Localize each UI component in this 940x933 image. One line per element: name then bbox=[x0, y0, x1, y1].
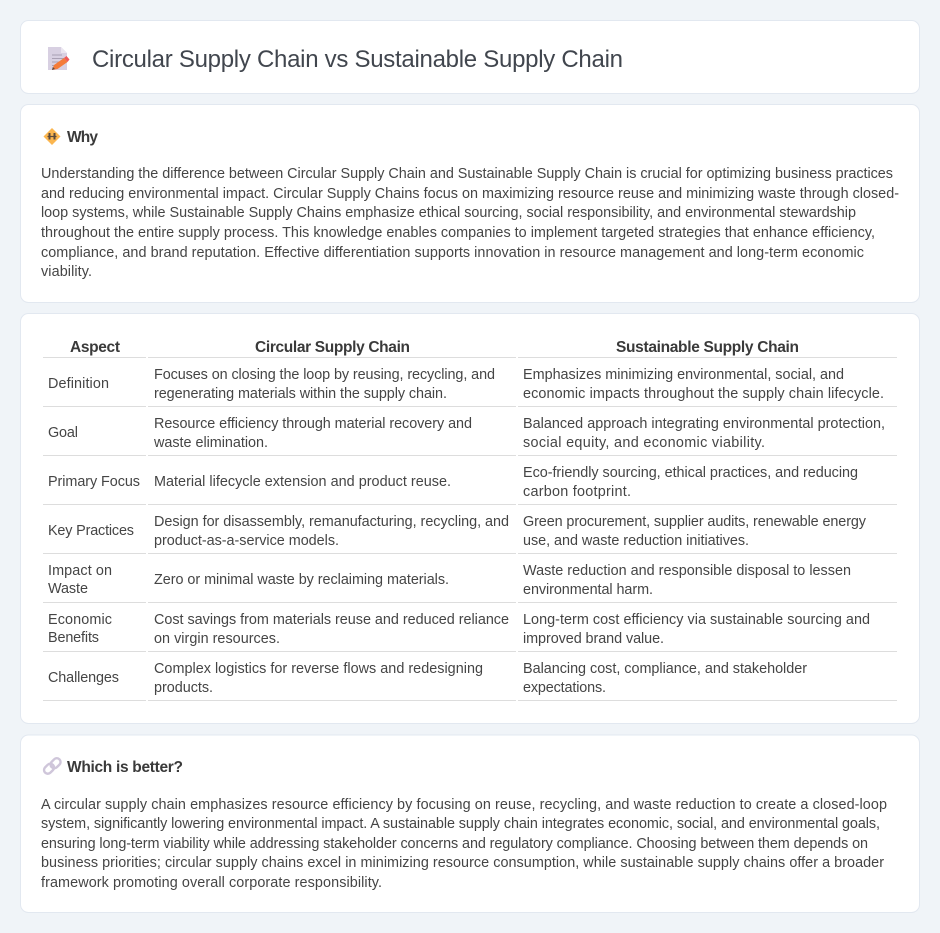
text block: which is better: framework promoting overall corporate responsibility. bbox=[41, 875, 382, 891]
row: primary focus bbox=[48, 465, 858, 500]
row: key practices: product-as-a-service models. bbox=[154, 533, 339, 549]
row: definition: Focuses on closing the loop by reusing, recycling, and bbox=[154, 367, 495, 383]
text block: why: and reducing environmental impact. Circular Supply Chains focus on maximizing resource reuse and minimizing waste through closed- bbox=[41, 186, 899, 202]
row: challenges: expectations. bbox=[523, 680, 606, 696]
row: economic benefits bbox=[48, 612, 870, 647]
row: economic benefits: Cost savings from materials reuse and reduced reliance bbox=[154, 612, 509, 628]
table header: Sustainable Supply Chain bbox=[616, 339, 799, 356]
panel: header bbox=[20, 20, 920, 94]
row: impact on waste: environmental harm. bbox=[523, 582, 653, 598]
row: primary focus: Material lifecycle extension and product reuse. bbox=[154, 474, 451, 490]
text block: which is better: business priorities; circular supply chains excel in minimizing resource consumption, while sustainable supply chains offer a broader bbox=[41, 855, 884, 871]
row: definition bbox=[48, 367, 884, 402]
panel: which is better bbox=[20, 735, 920, 912]
table header bbox=[70, 339, 799, 356]
icon: chain link bbox=[42, 757, 62, 775]
row: goal bbox=[48, 416, 885, 451]
row: goal: waste elimination. bbox=[153, 435, 268, 451]
row: challenges: Complex logistics for reverse flows and redesigning bbox=[154, 661, 483, 677]
row: key practices: Design for disassembly, remanufacturing, recycling, and bbox=[154, 514, 509, 530]
row: impact on waste: Zero or minimal waste by reclaiming materials. bbox=[154, 572, 449, 588]
row: key practices: Key Practices bbox=[48, 523, 134, 539]
row: goal: Balanced approach integrating environmental protection, bbox=[523, 416, 885, 432]
panel: comparison table bbox=[20, 314, 920, 724]
row: economic benefits: Benefits bbox=[48, 630, 99, 646]
row: challenges bbox=[48, 661, 807, 696]
row: definition: economic impacts throughout the supply chain lifecycle. bbox=[523, 386, 884, 402]
text block: which is better: A circular supply chain emphasizes resource efficiency by focusing on reuse, recycling, and waste reduction to create a closed-loop bbox=[41, 797, 887, 813]
panel: why bbox=[20, 104, 920, 302]
icon: document with pencil bbox=[48, 47, 70, 70]
row: primary focus: carbon footprint. bbox=[523, 484, 631, 500]
row: key practices: use, and waste reduction initiatives. bbox=[523, 533, 749, 549]
row: primary focus: Eco-friendly sourcing, ethical practices, and reducing bbox=[523, 465, 858, 481]
text block: why: loop systems, while Sustainable Supply Chains emphasize ethical sourcing, social responsibility, and environmental stewardship bbox=[41, 205, 856, 221]
row: economic benefits: Long-term cost efficiency via sustainable sourcing and bbox=[523, 612, 870, 628]
row: goal: Resource efficiency through material recovery and bbox=[154, 416, 472, 432]
row: goal: social equity, and economic viability. bbox=[523, 435, 765, 451]
row: definition: Definition bbox=[48, 376, 109, 392]
title: Circular Supply Chain vs Sustainable Supply Chain bbox=[92, 46, 623, 73]
icon: diamond sign bbox=[44, 128, 60, 145]
row: goal: Goal bbox=[48, 425, 78, 441]
heading: which is better: Which is better? bbox=[67, 759, 183, 776]
text block: why bbox=[41, 166, 899, 280]
row: economic benefits: Economic bbox=[48, 612, 112, 628]
text block: why: Understanding the difference between Circular Supply Chain and Sustainable Supply Chain is crucial for optimizing business practices bbox=[41, 166, 893, 182]
row: economic benefits: improved brand value. bbox=[523, 631, 664, 647]
row: impact on waste: Waste reduction and responsible disposal to lessen bbox=[523, 563, 851, 579]
heading: why: Why bbox=[67, 129, 98, 146]
row: impact on waste: Waste bbox=[48, 581, 88, 597]
row: challenges: Balancing cost, compliance, and stakeholder bbox=[523, 661, 807, 677]
row: definition: regenerating materials within the supply chain. bbox=[154, 386, 447, 402]
text block: which is better: system, significantly lowering environmental impact. A sustainable supply chain integrates economic, social, and environmental goals, bbox=[41, 816, 880, 832]
row: impact on waste: Impact on bbox=[48, 563, 112, 579]
text block: which is better: ensuring long-term viability while addressing stakeholder concerns and regulatory compliance. Choosing between them depends on bbox=[41, 836, 868, 852]
row: key practices: Green procurement, supplier audits, renewable energy bbox=[523, 514, 867, 530]
table header: Aspect bbox=[70, 339, 120, 356]
row: definition: Emphasizes minimizing environmental, social, and bbox=[523, 367, 844, 383]
text block: which is better bbox=[41, 797, 887, 891]
text block: why: throughout the entire supply process. This knowledge enables companies to implement targeted strategies that enhance efficiency, bbox=[41, 225, 875, 241]
row: key practices bbox=[48, 514, 867, 549]
table header: Circular Supply Chain bbox=[255, 339, 410, 356]
row: primary focus: Primary Focus bbox=[48, 474, 140, 490]
row: challenges: Challenges bbox=[48, 670, 119, 686]
row: economic benefits: on virgin resources. bbox=[154, 631, 280, 647]
text block: why: compliance, and brand reputation. Effective differentiation supports innovation in resource management and long-term economic bbox=[41, 245, 864, 261]
row: challenges: products. bbox=[154, 680, 213, 696]
text block: why: viability. bbox=[41, 264, 92, 280]
row: impact on waste bbox=[48, 563, 851, 598]
